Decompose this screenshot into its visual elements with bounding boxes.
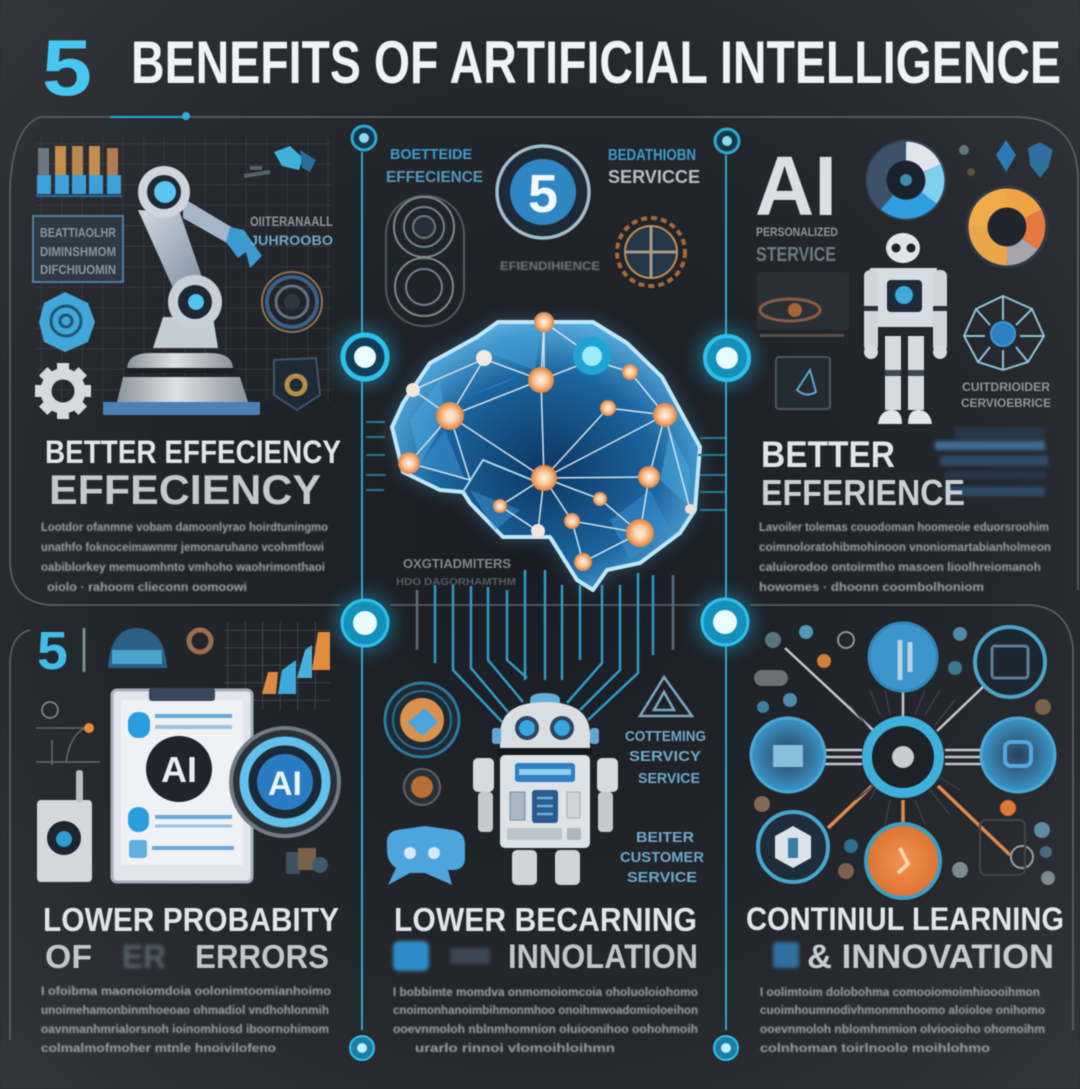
device icon: [37, 770, 92, 882]
heading: BETTER EFFECIENCY: [45, 434, 341, 470]
body text: I ofoibma maonoiomdoia oolonimtoomianhoimo: [41, 984, 331, 998]
AI badge: AI: [268, 765, 302, 803]
label left: EFFECIENCE: [386, 169, 483, 186]
panel: customer service: CUSTOMER: [620, 849, 704, 866]
small label: CUITDRIOIDER: [962, 380, 1050, 394]
label right: [608, 147, 700, 187]
icon: flying gadget: [244, 146, 316, 176]
icon: capsule: [386, 196, 464, 326]
icon: blue shield: [39, 292, 95, 352]
body text: [760, 985, 1045, 1055]
labels: SERVICE: [638, 770, 700, 787]
node top right: [699, 330, 755, 386]
label under brain: OXGTIADMITERS: [403, 556, 511, 571]
body text: I oolimtoim dolobohma comooiomoimhioooihmon: [760, 985, 1040, 999]
body text: [41, 520, 328, 594]
label left: BOETTEIDE: [390, 146, 472, 163]
clipboard: [112, 688, 252, 882]
robot: [473, 693, 618, 885]
body text: ooevnmoloh nblnmhomnion oluioonihoo oohohmoih: [393, 1022, 698, 1036]
body text: [393, 985, 698, 1055]
label right: SERVICCE: [608, 167, 700, 187]
node bottom right: [697, 594, 753, 650]
node bottom left: [337, 595, 393, 651]
body text: I bobbimte momdva onmomoiomcoia oholuoloiohomo: [393, 985, 698, 999]
badge 5: 5: [528, 164, 558, 224]
heading: BETTER: [761, 434, 895, 475]
labels: SERVICY: [629, 748, 701, 765]
small icons: [959, 140, 1053, 178]
gauge: [967, 187, 1047, 267]
icon: orb small: [404, 769, 440, 805]
info box: DIMINSHMOM: [40, 244, 116, 259]
circuit lines to robot: [417, 570, 673, 722]
panel: lower probability of errors: [36, 621, 339, 1055]
top line marker: [182, 112, 190, 120]
body text: oavnmanhmrialorsnoh ioinomhiosd iboornohimom: [41, 1022, 329, 1036]
node top left: [337, 329, 393, 385]
body text: urarlo rinnoi vlomoihloihmn: [415, 1041, 615, 1055]
body text: howomes · dhoonn coombolhoniom: [759, 580, 984, 594]
heading second line: OF: [45, 938, 92, 975]
heading second line: [393, 938, 698, 976]
clipboard: AI: [161, 749, 197, 790]
panel: customer service: SERVICE: [627, 869, 697, 886]
panel: customer service: BEITER: [636, 829, 694, 846]
central brain: [392, 312, 700, 590]
icon: badge: [274, 358, 320, 410]
small label: EFIENDIHIENCE: [500, 259, 600, 273]
body text: [41, 984, 331, 1055]
panel: centre top: [386, 142, 700, 326]
bars: [935, 427, 1048, 496]
robotic arm: [103, 166, 262, 415]
body text: caluiorodoo ontoirmtho masoen lioolhreiomanoh: [759, 560, 1041, 574]
panel: continual learning: [746, 623, 1064, 1055]
body text: Lavoiler tolemas couodoman hoomeoie eduorsroohim: [759, 520, 1049, 534]
labels: COTTEMING: [625, 728, 706, 745]
heading second line: ER: [122, 938, 166, 975]
icon: target gear: [262, 272, 322, 332]
icon: speech bubble: [387, 826, 465, 885]
body text: oabiblorkey memuomhnto vmhoho waohrimonthaoi: [41, 560, 325, 574]
side label: [250, 213, 333, 248]
labels: [625, 728, 706, 787]
info box: BEATTIAOLHR: [40, 225, 116, 240]
small gadget: [286, 848, 328, 874]
small label: CERVIOEBRICE: [961, 396, 1051, 410]
body text: [759, 520, 1051, 594]
background grid: [36, 137, 331, 402]
labels: STERVICE: [756, 244, 836, 266]
hub network: [751, 623, 1055, 898]
body text: colnhoman toirlnoolo moihlohmo: [760, 1041, 990, 1055]
heading second line: INNOLATION: [508, 938, 698, 976]
labels: [756, 225, 838, 266]
connector nodes: [337, 329, 755, 1060]
body text: cnoimonhanoimbihmonmhoo onoihmwoadomioloeihon: [393, 1003, 698, 1017]
glowing orb: [573, 337, 611, 375]
mini chart line: [36, 702, 100, 765]
body text: cuoimhoumnodivhmonmnhoomo aloioloe onihomo: [760, 1003, 1045, 1017]
body text: oiolo · rahoom clieconn oomoowi: [47, 580, 247, 594]
panel: customer service: [385, 677, 706, 1055]
AI badge: [231, 728, 339, 836]
AI text: AI: [755, 139, 837, 233]
badge 5: [493, 142, 593, 242]
info box: DIFCHIUOMIN: [40, 262, 116, 277]
donut chart: [867, 141, 945, 219]
small label: [961, 380, 1051, 410]
icon: ornate circuit: [617, 218, 685, 286]
body text: unathfo foknoceimawnmr jemonaruhano vcohmtfowi: [41, 540, 324, 554]
brain facets: [410, 330, 690, 560]
heading second line: & INNOVATION: [807, 938, 1054, 976]
heading second line: [45, 938, 329, 975]
body text: unoimehamonbinmhoeoao ohmadiol vndhohlonmih: [41, 1003, 329, 1017]
title: [42, 23, 1061, 112]
icon: triangle: [640, 677, 692, 716]
panel: better efficiency: [33, 137, 341, 594]
icon: gear: [35, 363, 91, 419]
node bottom right end: [714, 1036, 738, 1060]
mini icons: [84, 628, 211, 672]
panels stack: [757, 272, 849, 409]
label left: [386, 146, 483, 186]
hex icon: [964, 296, 1044, 370]
heading: LOWER PROBABITY: [43, 901, 339, 938]
numeral 5: 5: [37, 621, 68, 681]
body text: colmalmofmoher mtnle hnoivilofeno: [41, 1041, 276, 1055]
title numeral 5: 5: [42, 23, 92, 112]
side label: OIITERANAALL: [250, 213, 333, 229]
top node right: [715, 129, 739, 153]
body text: ooevnmoloh nblomhmmion olviooioho ohomoihm: [760, 1022, 1045, 1036]
body text: Lootdor ofanmne vobam damoonlyrao hoirdtuningmo: [41, 520, 328, 534]
network nodes: [398, 312, 695, 571]
top node left: [352, 126, 376, 150]
heading second line: ERRORS: [195, 938, 329, 975]
body text: coimnoloratohibmohinoon vnoniomartabianholmeon: [759, 540, 1051, 554]
heading large: EFFERIENCE: [761, 472, 965, 513]
side label: JUHROOBO: [250, 232, 333, 248]
panel: AI robot: [755, 139, 1053, 594]
icon: bar chart: [36, 146, 122, 197]
heading large: EFFECIENCY: [49, 466, 321, 513]
icon: ring: [385, 683, 459, 757]
info box: [33, 216, 123, 282]
label under brain: [396, 556, 516, 588]
brain side dashes: [366, 422, 725, 510]
label under brain: HDO DAGORHAMTHM: [396, 577, 516, 588]
mini bar chart: [224, 622, 330, 710]
robot: [864, 233, 947, 424]
node bottom left end: [350, 1036, 374, 1060]
labels: PERSONALIZED: [756, 225, 838, 239]
heading: LOWER BECARNING: [394, 901, 697, 938]
label right: BEDATHIOBN: [608, 147, 696, 164]
